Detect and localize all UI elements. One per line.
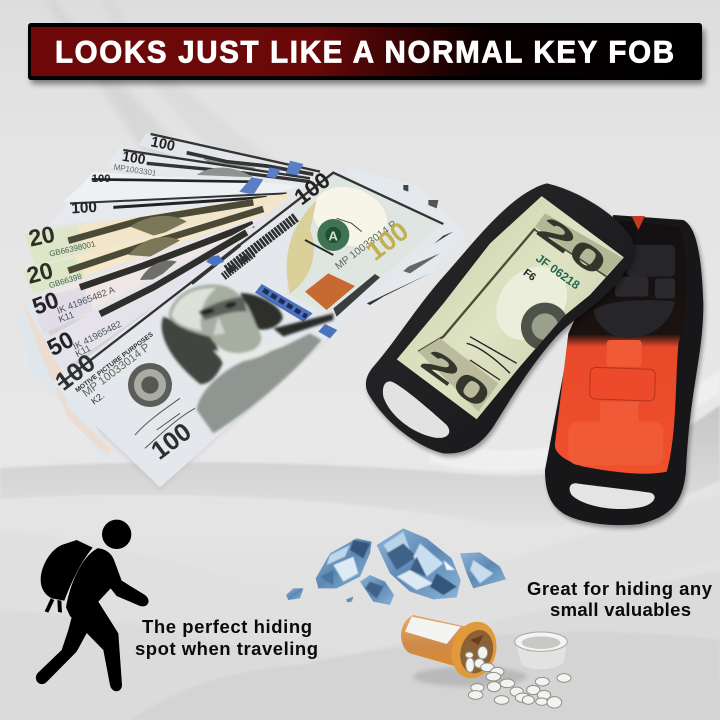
first twenty note: 20 xyxy=(26,221,57,252)
caption: valuables: Great for hiding any xyxy=(527,578,713,599)
fourth hundred note xyxy=(50,192,293,225)
pill bottle with spilled pills xyxy=(401,615,571,708)
pills xyxy=(465,646,571,708)
semicircular button xyxy=(593,300,675,338)
bottle body xyxy=(401,615,473,667)
bottle opening xyxy=(445,617,503,683)
third hundred note xyxy=(63,172,300,203)
dark band xyxy=(333,274,380,317)
dark top border xyxy=(58,173,443,385)
first fifty note: 50 xyxy=(29,286,62,320)
back half of key fob with red interior xyxy=(545,215,705,528)
Franklin portrait xyxy=(162,284,333,433)
front half of key fob holding twenty dollar note xyxy=(366,183,635,457)
signature lines xyxy=(467,337,517,380)
serial number right: MP 10033014 P xyxy=(334,219,399,272)
second hundred note: 100 xyxy=(121,148,147,167)
treasury seal xyxy=(128,363,172,407)
hatch bands xyxy=(227,217,297,270)
fan of banknotes xyxy=(17,133,467,490)
diamonds xyxy=(286,528,506,605)
first fifty note: K11 xyxy=(57,309,76,325)
upper note value: 20 xyxy=(530,209,613,284)
right diamond xyxy=(460,552,506,588)
watermark and seal xyxy=(496,266,567,340)
first fifty note: IK 41965482 A xyxy=(55,284,117,316)
third hundred note: 100 xyxy=(92,173,111,185)
micro diamond xyxy=(346,597,353,602)
golden feather xyxy=(287,200,317,293)
second fifty note: K11 xyxy=(74,343,92,359)
second fifty note: IK 41965482 xyxy=(71,319,123,352)
first twenty note xyxy=(24,193,293,266)
series code: K2. xyxy=(89,390,106,407)
copper patch xyxy=(305,273,355,310)
second fifty note xyxy=(43,220,260,367)
second twenty note: 20 xyxy=(24,257,56,289)
signatures xyxy=(135,398,195,448)
small diamond xyxy=(360,575,394,605)
torso arm and front leg xyxy=(66,548,149,691)
title banner: LOOKS JUST LIKE A NORMAL KEY FOB xyxy=(55,35,674,70)
fourth hundred note: 100 xyxy=(71,199,97,217)
upper note ornament xyxy=(535,213,623,277)
lower hundred mark: 100 xyxy=(146,418,197,465)
back leg xyxy=(36,617,87,684)
top hundred note xyxy=(138,133,322,192)
left hundred mark: 100 xyxy=(50,349,101,396)
green seal xyxy=(317,219,349,251)
second hundred note xyxy=(105,148,313,195)
second twenty note xyxy=(22,200,287,293)
middle button recesses xyxy=(615,277,675,298)
second twenty note: GB66398 xyxy=(48,272,83,290)
folded twenty dollar note xyxy=(397,196,624,419)
soft shadow under notes xyxy=(27,287,333,490)
hiker icon xyxy=(36,520,149,691)
second hundred note: MP1003301 xyxy=(113,162,158,178)
caption: valuables: small valuables xyxy=(550,599,691,620)
gold hundred: 100 xyxy=(361,216,414,266)
top button recess xyxy=(627,245,675,277)
red dab at top xyxy=(632,216,645,230)
pack straps xyxy=(45,598,62,613)
bottle cap xyxy=(515,632,567,669)
backpack xyxy=(41,540,93,601)
note code: F6 xyxy=(521,267,538,284)
green seal: A xyxy=(328,229,338,244)
tiny diamond xyxy=(286,588,303,600)
lower note ornament xyxy=(418,338,498,412)
top corner hundred: 100 xyxy=(289,166,335,210)
motive text: MOTIVE PICTURE PURPOSES xyxy=(74,331,155,394)
watermark oval xyxy=(304,177,396,256)
blue security ribbon xyxy=(207,255,224,267)
caption: traveling xyxy=(135,616,318,659)
pale under-layer notes xyxy=(17,167,467,463)
caption: valuables xyxy=(527,578,713,620)
caption: traveling: The perfect hiding xyxy=(142,616,312,637)
large diamond xyxy=(377,528,461,599)
first fifty note xyxy=(29,215,267,334)
first twenty note: GB66398001 xyxy=(48,239,97,259)
top hundred note: 100 xyxy=(149,134,176,155)
caption: traveling: spot when traveling xyxy=(135,638,318,659)
raised tab xyxy=(589,367,656,401)
title banner xyxy=(28,23,705,84)
note serial: JF 06218 xyxy=(533,251,583,292)
bottle label xyxy=(405,617,461,644)
key ring slot xyxy=(570,483,655,509)
serial number left: MP 10033014 P xyxy=(81,341,153,400)
main hundred dollar note xyxy=(50,166,454,487)
left diamond xyxy=(316,538,372,588)
red interior xyxy=(555,220,687,474)
lower note value: 20 xyxy=(414,342,497,417)
second fifty note: 50 xyxy=(43,326,78,361)
key ring slot xyxy=(383,381,449,438)
